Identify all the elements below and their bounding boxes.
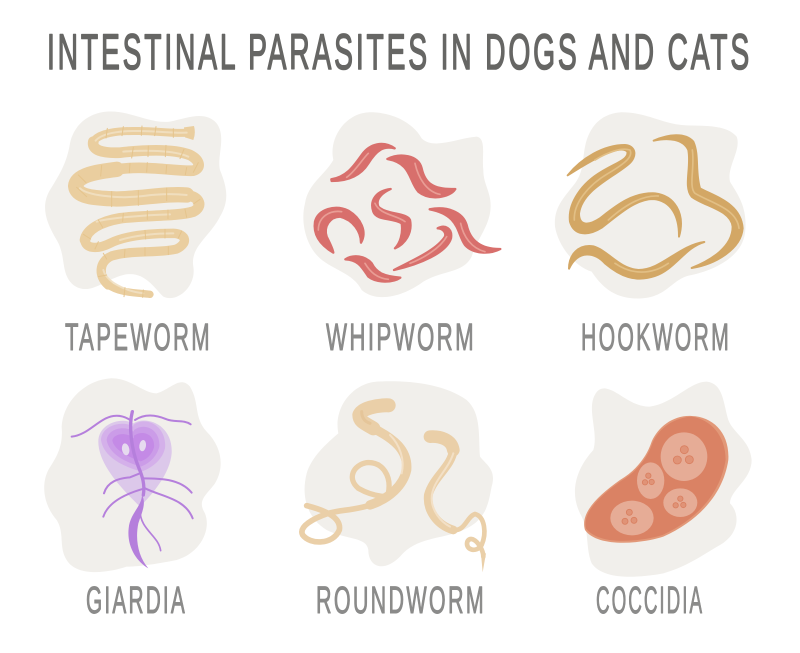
hookworm background blob — [555, 112, 746, 298]
panel: hookworm — [555, 112, 746, 359]
label: whipworm: WHIPWORM — [326, 317, 476, 359]
icon: tapeworm body — [76, 131, 199, 294]
roundworm right highlight — [432, 453, 453, 527]
panel: whipworm — [303, 112, 500, 359]
icon: coccidia body — [584, 416, 728, 543]
coccidia cells — [661, 432, 707, 481]
label: roundworm: ROUNDWORM — [316, 580, 486, 622]
icon: roundworm left — [302, 405, 407, 542]
roundworm background blob — [305, 381, 493, 566]
panel: tapeworm — [45, 112, 226, 359]
tapeworm background blob — [45, 112, 226, 298]
hookworm highlights — [574, 149, 739, 272]
panel: coccidia — [575, 382, 752, 622]
panel: roundworm — [302, 381, 493, 622]
icon: giardia cell — [98, 420, 172, 507]
tapeworm highlight — [80, 131, 188, 293]
coccidia spores — [622, 446, 693, 524]
giardia flagella — [72, 412, 193, 551]
label: tapeworm: TAPEWORM — [65, 317, 212, 359]
tapeworm segments — [77, 126, 200, 297]
icon: whipworms — [315, 144, 500, 282]
giardia background blob — [44, 378, 221, 572]
whipworm highlights — [318, 153, 485, 279]
panel: giardia — [44, 378, 221, 622]
coccidia background blob — [575, 382, 752, 577]
icon: hookworms — [568, 135, 743, 279]
roundworm left highlight — [362, 412, 370, 423]
whipworm background blob — [303, 112, 491, 297]
icon: roundworm right — [428, 437, 484, 557]
label: giardia: GIARDIA — [86, 580, 187, 622]
